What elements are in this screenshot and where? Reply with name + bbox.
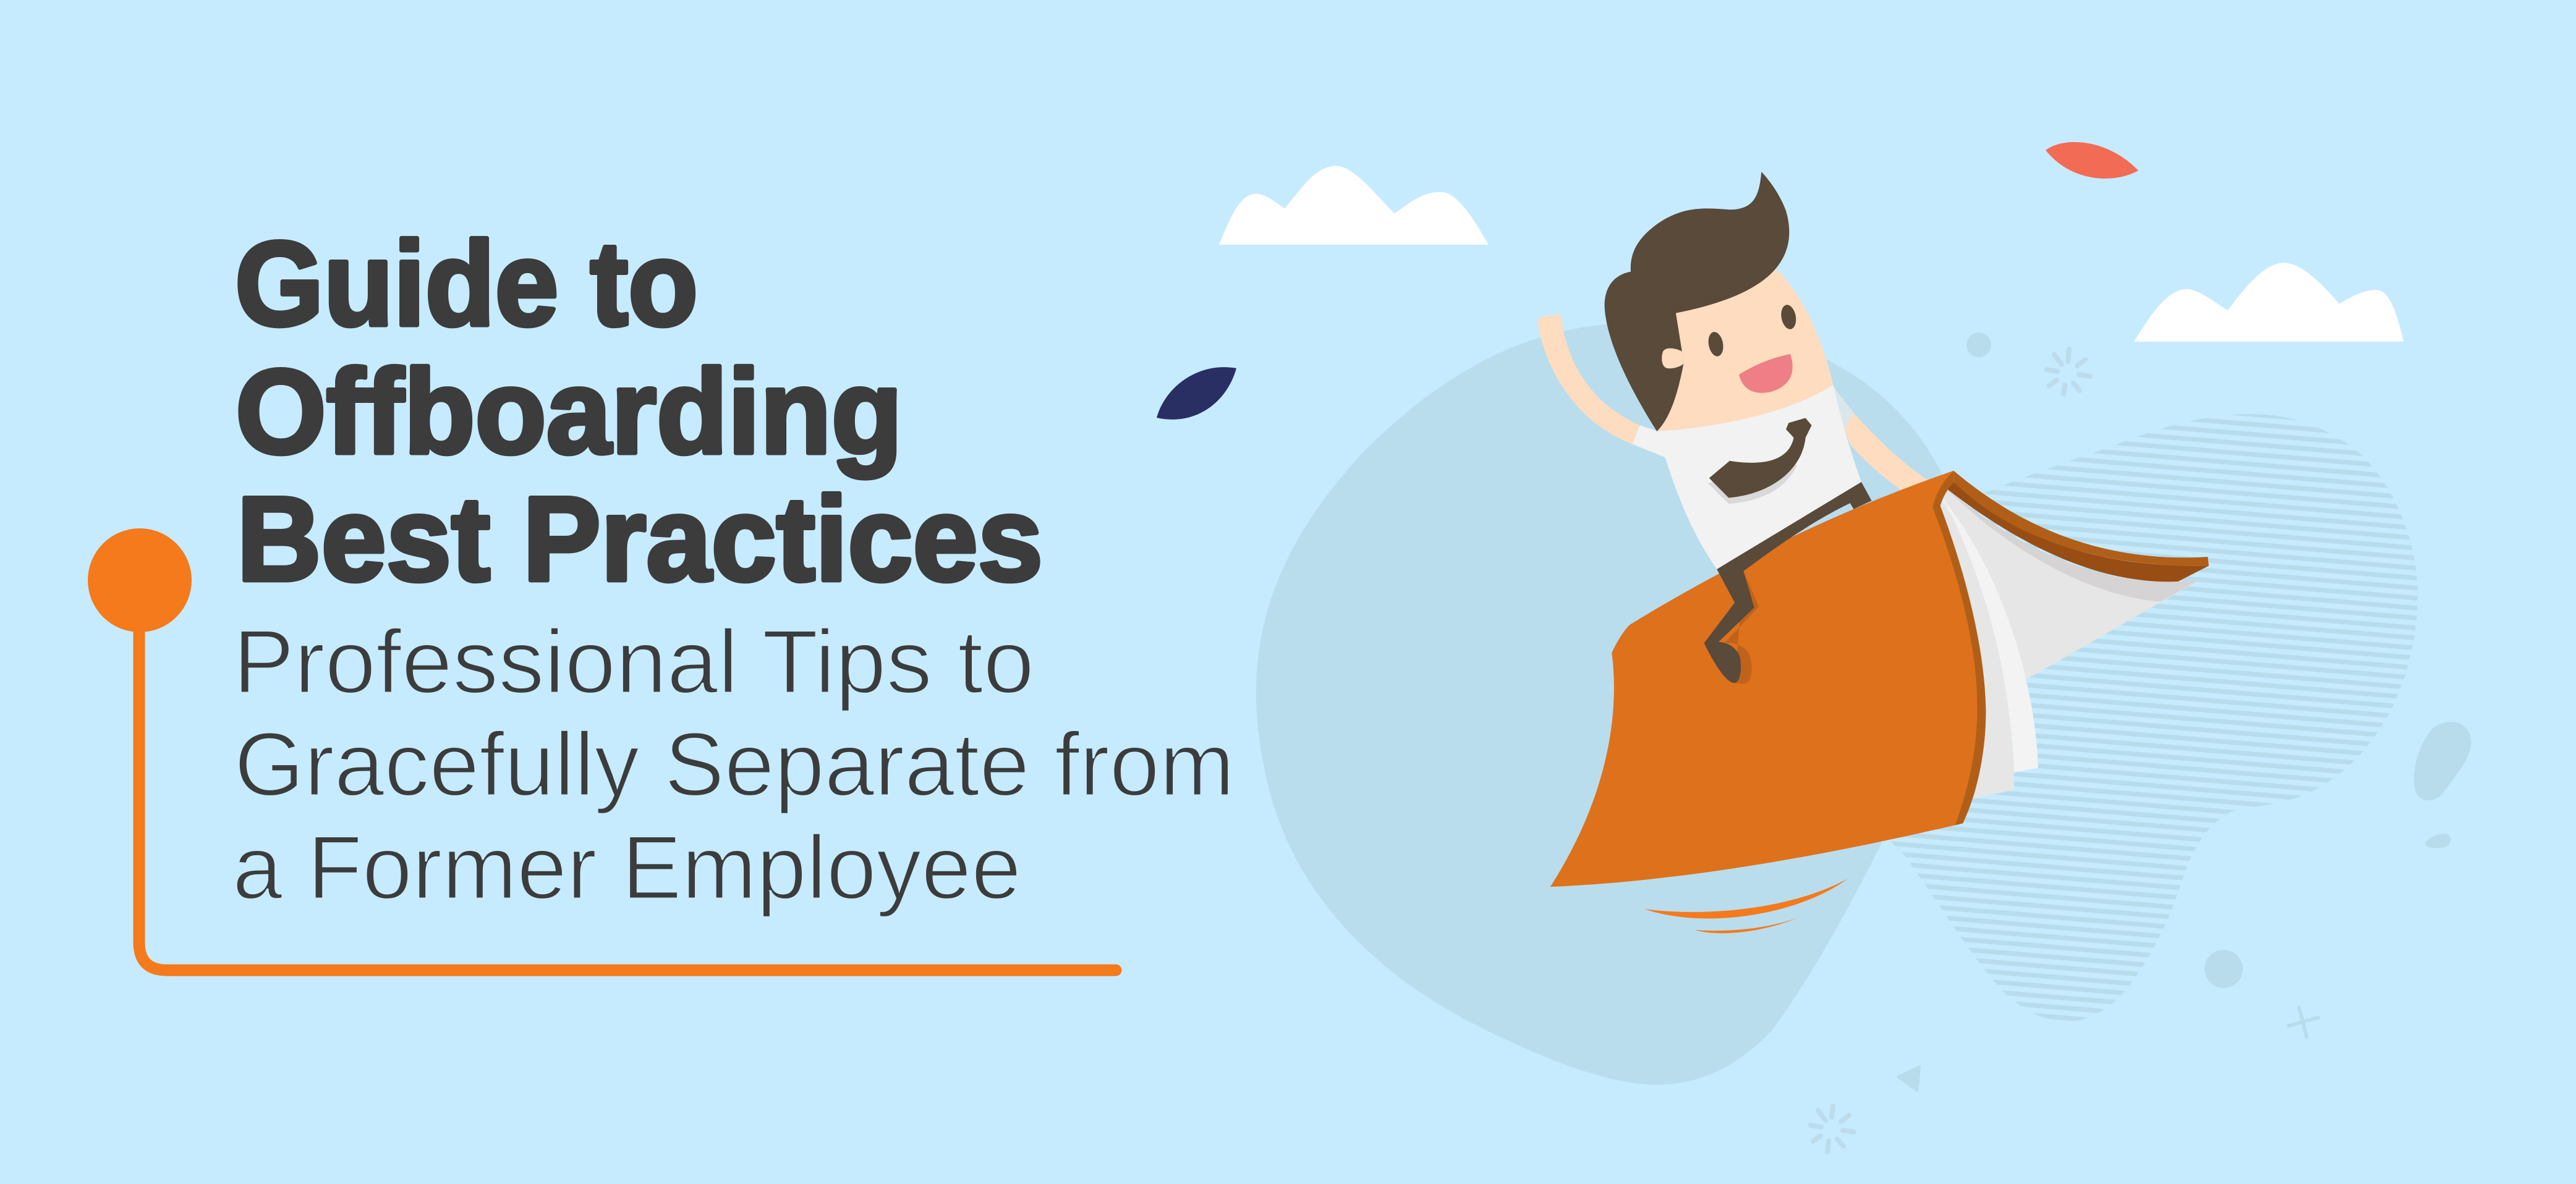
title: Best Practices — [237, 472, 1043, 606]
title: Offboarding — [236, 345, 903, 479]
head — [1658, 269, 1833, 431]
mouth — [1739, 354, 1793, 393]
subtitle: Professional Tips to — [233, 611, 1034, 712]
book back cover — [1947, 471, 2209, 581]
cloud: left — [1219, 166, 1489, 245]
orange dot — [88, 528, 192, 632]
ear — [1662, 349, 1683, 368]
legs — [1704, 482, 1872, 683]
tie shadow — [1708, 465, 1797, 504]
decorative striped blob — [1890, 414, 2418, 1021]
leg shadow — [1725, 571, 1759, 684]
decorative dots and shapes — [1898, 332, 2471, 1091]
subtitle — [232, 611, 1235, 918]
book spine band — [1932, 471, 1986, 826]
character riding a book — [1537, 172, 2209, 887]
eyes — [1707, 303, 1798, 357]
book pages — [1941, 489, 2198, 798]
back sleeve — [1833, 386, 1854, 429]
shirt — [1632, 384, 1861, 569]
leaf: navy — [1157, 367, 1236, 420]
leaf: red — [2046, 142, 2138, 179]
raised arm — [1537, 315, 1640, 444]
motion lines — [1644, 879, 1848, 933]
cloud: right — [2134, 263, 2404, 342]
hair — [1605, 172, 1789, 431]
star decoration — [2289, 1008, 2318, 1037]
sparkle top right — [2047, 349, 2090, 394]
back arm — [1844, 413, 1929, 491]
sparkle bottom — [1811, 1106, 1854, 1152]
book front cover — [1550, 471, 1985, 887]
large pale blue blob — [1256, 322, 1947, 1085]
orange timeline connector — [88, 528, 1116, 970]
title: Guide to — [235, 217, 698, 351]
tie — [1709, 418, 1812, 498]
title — [235, 217, 1043, 606]
subtitle: a Former Employee — [232, 817, 1021, 918]
subtitle: Gracefully Separate from — [234, 714, 1235, 814]
